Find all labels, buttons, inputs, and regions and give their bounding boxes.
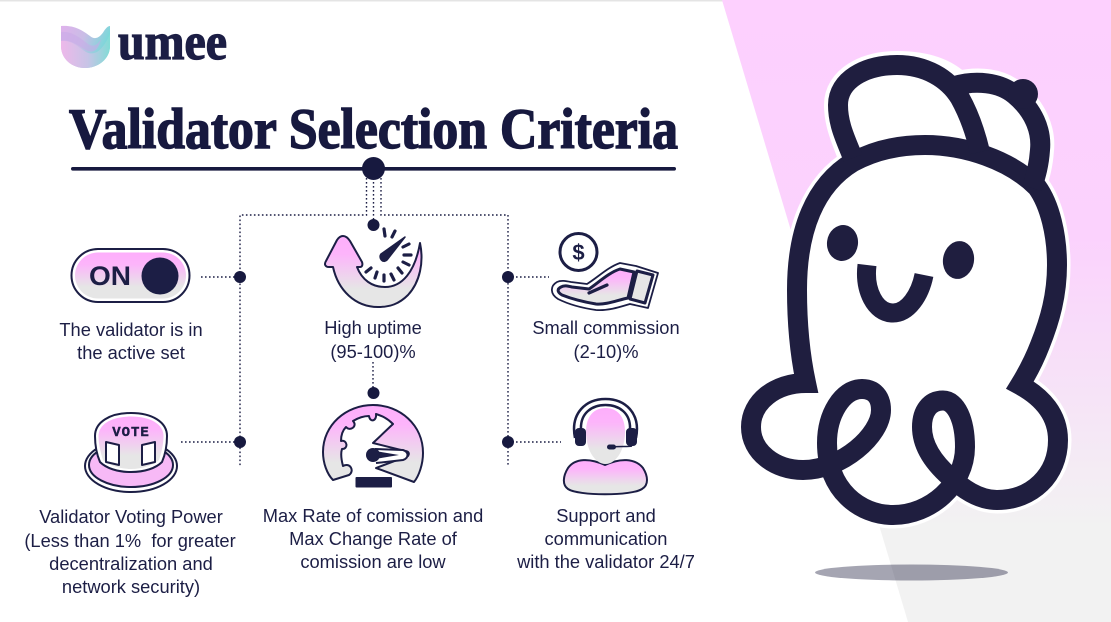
text: high uptime: High uptime [324, 317, 422, 338]
text: active set: the active set [77, 342, 185, 363]
text: max rate: Max Rate of comission and [263, 505, 483, 526]
text: support: communication [545, 528, 667, 549]
icon: on toggle: ON [89, 261, 131, 291]
mascot shadow [815, 564, 1008, 580]
dollar coin: $ [572, 240, 585, 265]
icon: vote button: VOTE [112, 425, 150, 441]
top border [0, 0, 1111, 2]
icon: uptime arrow with dial [325, 229, 422, 307]
text: support: with the validator 24/7 [516, 551, 695, 572]
text: voting power: Validator Voting Power [39, 506, 223, 527]
mascot hat outline [838, 65, 1040, 188]
mascot [751, 65, 1058, 515]
mascot hat fill [838, 65, 1040, 188]
head [586, 408, 625, 464]
icon: gauge [323, 405, 423, 488]
text: small commission: (2-10)% [573, 341, 639, 362]
title: Validator Selection Criteria [69, 98, 678, 161]
logo mark [61, 26, 110, 68]
text: voting power: decentralization and [49, 553, 213, 574]
hand [552, 263, 658, 310]
text: small commission: Small commission [532, 317, 680, 338]
mascot hat button [1008, 79, 1038, 109]
mascot right eye [940, 239, 977, 281]
text: max rate: Max Change Rate of [289, 528, 458, 549]
logo wordmark: umee [118, 14, 227, 71]
mascot gap fill [830, 420, 950, 505]
text: high uptime: (95-100)% [330, 341, 416, 362]
connector network [181, 178, 561, 467]
icon: support agent headset [564, 399, 647, 494]
bust [564, 460, 647, 494]
background diagonal panel [722, 0, 1111, 622]
headband [574, 399, 637, 438]
text: active set: The validator is in [59, 319, 203, 340]
icon: hand with dollar coin [552, 234, 658, 310]
mascot smile [867, 265, 924, 313]
icon: vote button [85, 413, 177, 492]
mascot left eye [825, 223, 860, 263]
mascot body outline [751, 145, 1058, 515]
text: voting power: network security) [62, 576, 200, 597]
text: max rate: comission are low [300, 551, 446, 572]
text: voting power: (Less than 1% for greater [24, 530, 236, 551]
mascot body fill [751, 145, 1058, 515]
text: support: Support and [556, 505, 656, 526]
icon: on toggle [72, 249, 190, 302]
title rule with hub [71, 157, 676, 180]
logo: umee [61, 14, 227, 71]
